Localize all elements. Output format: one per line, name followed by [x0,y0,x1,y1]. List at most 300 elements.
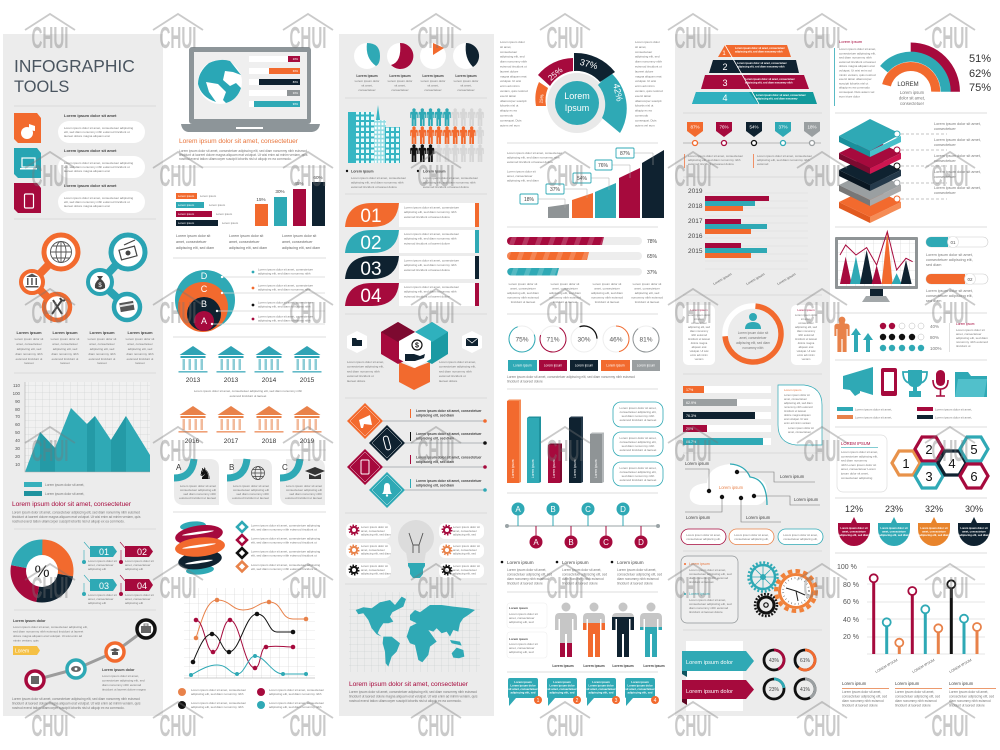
concentric arcs chart: LOREM [897,82,919,88]
icon: banknote [119,240,137,260]
value callouts: 87% [620,151,631,157]
side text left of radial chart: consectetuer [500,50,517,54]
side text left of radial chart: adipiscing elit, sed [500,55,525,59]
diamond: phone [347,449,383,485]
four text columns under bars: adipiscing elit, sed diam [591,291,623,295]
note box: Lorem ipsum dolor sit amet, [689,568,726,572]
speech bubbles: 2 [576,698,579,704]
two bullet text blocks: euismod tincidunt ut laoreet dolore [423,185,469,189]
horizontal bars [176,193,239,226]
vertical bars: 45% [294,181,304,186]
icon row [843,367,987,397]
bottom text columns [842,681,996,708]
four text columns [15,330,154,365]
panel: middle column background [339,34,494,716]
progress bars [249,56,300,107]
layered stack: consectetuer [934,143,956,147]
legend: adipiscing elit, sed diam nonummy nibh [258,318,311,322]
drop percent badges: adipiscing elit, sed diam [919,533,950,537]
diamond bullet list: Lorem ipsum dolor sit amet, consectetuer adipiscing [251,536,320,540]
legend: Lorem ipsum dolor sit amet, consectetuer [258,268,313,272]
three bullet text blocks: Lorem ipsum [507,560,534,565]
two bullet text blocks: Lorem ipsum [351,170,374,174]
ring side box right: Lorem ipsum [797,308,815,312]
watermark grid: CHUI [32,158,68,193]
drop percent badges: adipiscing elit, sed diam [879,533,910,537]
dot rating side text: Lorem ipsum dolor sit [956,328,985,332]
list labels: adipiscing elit, sed diam [416,414,454,418]
watermark grid: CHUI [290,708,326,743]
area chart: 100 [13,391,21,396]
area chart legend: Lorem ipsum dolor sit amet, [45,492,84,496]
side text left of radial chart: diam nonummy nibh [500,60,527,64]
four text columns under bars [507,282,663,304]
numbered hexagons: 3 [925,469,933,484]
numbered ribbon 02 [345,230,479,254]
grouped horizontal bars by year: 2015 [688,248,703,255]
body text bottom: nostrud exerci tation ullamcorper suscipit lobortis nisl ut aliquip ex ea commodo. [12,706,125,710]
four text columns: Lorem ipsum [127,330,153,335]
horizontal bars: Lorem ipsum [200,194,217,198]
area chart legend [24,482,84,496]
numbered ribbon 03: 03 [360,259,382,280]
line chart legend: adipiscing elit, sed diam nonummy nibh [269,692,322,696]
four text columns: Lorem ipsum dolor sit [15,337,43,341]
diamond icon list [347,403,487,508]
side text left of radial chart: commodo [500,114,514,118]
tag 03: amet, consectetuer [88,597,114,601]
line chart legend: Lorem ipsum dolor sit amet, consectetuer [269,701,324,705]
drop percent badges: Lorem ipsum dolor sit [840,527,868,530]
card B: sed diam nonummy nibh [236,492,269,496]
nested circles chart: A [201,316,207,326]
card A [174,459,219,505]
pyramid: Lorem ipsum dolor sit amet, consectetuer [756,94,806,97]
diamond bullet list: Lorem ipsum dolor sit amet, consectetuer adipiscing [251,524,320,528]
grouped horizontal bars by year: Lorem ipsum [713,272,732,286]
four pie charts: Lorem ipsum [455,74,477,78]
icon: credit card [119,301,135,312]
3D bar chart: Lorem ipsum [573,459,577,478]
ring side box left: aliquam erat [692,345,707,349]
side text right of radial chart: sit amet, [635,45,647,49]
layered stack: consectetuer [934,191,956,195]
outlined note: dolore magna aliquam [784,413,811,417]
outlined text boxes: consectetuer adipiscing elit, [620,440,657,444]
four text columns under bars: amet, consectetuer [510,286,536,290]
lollipop chart: 100 % [837,564,857,571]
percent rings: 75% [515,336,529,344]
outlined pills: Lorem ipsum dolor sit amet, [686,533,721,537]
tag 03 [82,575,117,605]
right column heading and text: euismod tincidunt ut laoreet [839,60,876,64]
four text columns under bars: tincidunt ut laoreet [553,300,577,304]
ring with person: adipiscing elit, sed diam [736,341,770,345]
watermark grid: CHUI [160,295,196,330]
side text left of radial chart: autem vel eum [500,123,520,127]
four text columns under bars: amet, consectetuer [552,286,578,290]
dot rating: 40% [930,324,939,329]
three bullet text blocks [501,560,662,586]
four text columns under bars: Lorem ipsum dolor sit [593,282,621,286]
numbered ribbon 01 [345,203,479,227]
bulb side pills: adipiscing elit, sed diam [361,552,391,556]
step 3 [106,643,124,661]
nested circles chart: B [201,299,207,309]
lollipop chart: 60 % [843,599,859,606]
horizontal bars: Lorem ipsum [178,194,195,198]
dot rating side text: tincidunt ut [956,344,971,348]
timeline text left: Lorem ipsum dolor [13,619,46,623]
progress bars: 30% [293,91,299,95]
four pie charts: Lorem ipsum dolor [421,79,445,83]
gears and clock [748,562,816,616]
outlined note: Lorem ipsum dolor sit [784,394,810,397]
two bullet text blocks: Lorem ipsum [423,170,446,174]
grouped horizontal bars by year: Lorem ipsum [746,272,765,286]
drop percent badges: Lorem ipsum dolor sit [880,527,908,530]
ring side box right: dolore magna [798,341,815,345]
right column heading and text: suscipit lobortis nisl ut [839,81,868,85]
people fill chart [552,602,665,668]
outlined text boxes: Lorem ipsum dolor sit amet, [619,436,657,440]
three text columns [176,234,320,250]
lollipop chart: LOREM IPSUM [949,658,972,674]
three bullet text blocks: consectetuer adipiscing elit, sed [562,572,607,576]
ring side box left: nibh euismod [691,333,707,337]
three bullet text blocks: diam nonummy nibh euismod [617,577,659,581]
list item 1: laoreet dolore magna aliquam erat [64,134,110,138]
horizontal bars: Lorem ipsum [222,221,239,225]
diamond: paperclip [369,425,405,461]
nested circles chart [175,268,325,332]
lorem ipsum box [837,435,887,492]
three text columns: adipiscing elit, sed diam [282,246,320,250]
numbered ribbon 04: euismod tincidunt ut laoreet dolore [404,294,450,298]
speech bubbles: Lorem ipsum [553,680,571,684]
outlined pills [681,529,823,544]
ring side box right: aliquam erat [799,345,814,349]
numbered ribbon 04 [345,283,479,307]
numbered ribbon 03: euismod tincidunt ut laoreet dolore [404,268,450,272]
gray layer [839,170,901,206]
list labels: adipiscing elit, sed diam [416,460,454,464]
alternating timeline: B [550,505,556,514]
bulb side pills: Lorem ipsum dolor sit [453,544,480,548]
bulb side pills: amet, consectetuer [361,568,385,572]
orange temples with years: 2019 [300,438,315,445]
icon: dollar hand: $ [415,342,419,350]
four text columns: adipiscing elit, sed [128,347,153,351]
right column heading and text: eum iriure dolor [839,94,860,98]
yellow tag [13,646,40,655]
progress bars striped: 37% [647,270,658,276]
icon row legend: Lorem ipsum dolor sit amet, [855,416,892,420]
line chart legend: Lorem ipsum dolor sit amet, consectetuer [269,688,324,692]
lollipop chart: 80 % [843,582,859,589]
colored labels [508,360,660,371]
speech bubbles: adipiscing elit, sed [549,690,575,694]
four text columns: diam nonummy nibh [51,352,79,356]
timeline text right: tincidunt ut laoreet dolore magna [102,688,146,692]
four text columns under bars: amet, consectetuer [594,286,620,290]
bulb side pills: adipiscing elit, sed [453,533,476,537]
watermark grid: CHUI [804,20,840,55]
area chart: 30 [15,446,21,451]
side text right of radial chart: euismod tincidunt ut [635,64,662,68]
bulb side pills: Lorem ipsum dolor sit [361,564,388,568]
icon row legend [837,407,972,420]
pennant text: Lorem ipsum dolor sit amet, consectetuer [688,154,743,158]
cloud diagram: Lorem ipsum [685,461,710,466]
drop percent badges: adipiscing elit, sed diam [959,533,990,537]
bottom text columns: Lorem ipsum dolor sit amet, [949,690,988,694]
dot rating side text [949,322,988,352]
outlined text boxes: consectetuer adipiscing elit, [620,410,657,414]
gear icons [350,526,452,574]
three bullet text blocks: tincidunt ut laoreet dolore [617,582,653,586]
lorem ipsum box: consectetuer adipiscing [841,476,873,480]
list item 2 [58,148,145,178]
line chart legend [178,688,324,709]
hex text right: consectetuer adipiscing elit, [439,365,476,369]
watermark grid: CHUI [546,295,584,330]
watermark grid: CHUI [418,433,454,468]
growth bar chart [520,148,664,218]
ring side box right: consectetuer [798,321,814,325]
note box: diam nonummy nibh euismod [689,606,729,610]
value callouts [520,148,634,204]
radial percent chart: 25% [546,65,564,83]
heading: crimson map: Lorem ipsum dolor sit amet, consectetuer [349,681,469,688]
dot rating side text: nonummy nibh euismod [956,340,988,344]
three text columns: amet, consectetuer [176,240,207,244]
watermark grid: CHUI [290,20,326,55]
pennant percent row: 87% [690,124,700,130]
outlined text boxes: euismod tincidunt ut laoreet [620,448,657,452]
ring side box left: diam nonummy [690,329,709,333]
speech bubbles: adipiscing elit, sed [510,690,536,694]
four text columns: adipiscing elit, sed [17,347,42,351]
list item 2: laoreet dolore magna aliquam erat [64,169,110,173]
layered stack: Lorem ipsum dolor sit amet, [934,122,981,126]
ring side box left: adipiscing elit, sed [688,325,710,329]
watermark grid: CHUI [546,433,584,468]
3D bar chart [507,400,604,483]
hex text left: laoreet dolore [347,379,366,383]
area chart [13,382,150,472]
diamond: bell [369,472,405,508]
watermark grid: CHUI [418,708,454,743]
side text left of radial chart: euismod tincidunt ut [500,64,527,68]
ring side box left [683,305,715,365]
numbered hexagons: 1 [902,456,910,471]
legend: Lorem ipsum dolor sit amet, consectetuer [258,314,313,318]
folder hex icon [347,331,367,353]
lollipop chart: LOREM IPSUM [875,658,898,674]
tag 01: amet, consectetuer [88,563,114,567]
tag 03: Lorem ipsum dolor sit [88,593,117,597]
speech bubbles: 3 [615,698,618,704]
three bullet text blocks: Lorem ipsum dolor sit amet, [617,568,656,572]
outlined note: nonummy nibh euismod [784,405,813,409]
legend: Lorem ipsum dolor sit amet, consectetuer [258,284,313,288]
side text right of radial chart: consequat. Duis [635,118,657,122]
speech bubbles: sit amet, consectetuer [547,687,578,691]
layered stack: Lorem ipsum dolor sit amet, [934,186,981,190]
speech bubbles: 4 [654,698,657,704]
icon: user [745,313,761,329]
timeline text left: Lorem ipsum dolor sit amet, consectetuer adipiscing elit, [13,625,88,629]
watermark grid: CHUI [804,295,840,330]
outlined pills: Lorem ipsum dolor sit amet, [734,533,769,537]
pennant text: euismod tincidunt ut laoreet dolore [688,162,734,166]
outlined note: amet, consectetuer [784,397,807,401]
side text left of radial chart: lobortis nisl ut [500,104,519,108]
outlined note: tincidunt ut laoreet [784,409,806,413]
right column heading and text: Lorem ipsum [839,39,863,44]
dot rating: 100% [930,346,942,351]
bulb side pills [346,523,484,578]
numbered ribbon 01: adipiscing elit, sed diam nonummy nibh [404,210,457,214]
outlined text boxes: euismod tincidunt ut laoreet [620,418,657,422]
grouped horizontal bars by year: 2019 [688,188,703,195]
teal temples with years: 2013 [224,377,239,384]
bottom text columns: diam nonummy nibh euismod [842,699,884,703]
list item 2: Lorem ipsum dolor sit amet, consectetuer adipiscing [64,161,133,165]
timeline text right: Lorem ipsum dolor sit amet, [102,674,139,678]
body text: nostrud exerci tation ullamcorper suscipit lobortis nisl ut aliquip ex ea commodo. [179,157,292,161]
numbered hexagons: 4 [948,456,956,471]
ribbon: teal [682,651,754,677]
speech bubbles: Lorem ipsum dolor [510,684,537,688]
lollipop chart [837,564,985,674]
pennant text: euismod [757,162,769,166]
watermark grid: CHUI [32,708,68,743]
bulb side pills: adipiscing elit, sed diam [361,533,391,537]
dot rating: 80% [930,335,939,340]
card B: B [229,463,234,472]
pyramid: adipiscing elit, sed diam nonummy nibh [745,82,793,84]
icon row legend: Lorem ipsum dolor sit amet, [935,408,972,412]
four text columns: Lorem ipsum [16,330,42,335]
drop percent badges: amet, consectetuer [842,530,866,534]
lorem ipsum box: ipsum dolor sit amet, [841,472,869,476]
three bullet text blocks: diam nonummy nibh euismod [562,577,604,581]
teal series [189,654,308,677]
teal temples with years: 2014 [262,377,277,384]
concentric arcs chart: 62% [969,68,991,80]
icon: megaphone [843,367,873,396]
speech bubbles: 1 [537,698,540,704]
speech bubbles: sit amet, consectetuer [625,687,656,691]
numbered ribbon 04: Lorem ipsum dolor sit amet, consectetuer [404,285,459,289]
outlined text boxes: sed diam nonummy nibh [622,444,655,448]
area chart: 110 [13,383,21,388]
outlined note: Lorem ipsum [784,388,802,392]
ring with person: amet, consectetuer [739,336,767,340]
side text left of radial chart: consequat. Duis [500,118,522,122]
area chart legend: Lorem ipsum dolor sit amet, [45,483,84,487]
small text boxes: Lorem ipsum [509,637,528,641]
outlined text boxes: consectetuer adipiscing elit, [620,470,657,474]
list labels: adipiscing elit, sed diam [416,484,454,488]
panel: right column background [675,34,830,716]
lorem ipsum box: amet, consectetuer Lorem [841,467,876,471]
four text columns: Lorem ipsum dolor sit [88,337,116,341]
icon: phone tile [14,183,41,213]
list item 3: Lorem ipsum dolor sit amet [64,183,117,188]
bulb side pills: amet, consectetuer [453,548,477,552]
percent rings: 81% [639,336,653,344]
cloud diagram: Lorem ipsum [780,474,805,479]
teal temples with years [178,346,322,384]
small rings: 43% [769,658,780,664]
four pie charts: Lorem ipsum dolor [355,79,379,83]
pennant percent row [683,122,821,146]
layered stack: consectetuer [934,159,956,163]
concentric arcs chart [884,47,991,106]
note box: consectetuer adipiscing elit, sed [689,572,732,576]
watermark grid: CHUI [674,295,712,330]
four text columns: diam nonummy nibh [126,352,154,356]
diamond bullet list: Lorem ipsum dolor sit amet, consectetuer adipiscing [251,550,320,554]
ring with person [723,304,783,364]
three bullet text blocks: tincidunt ut laoreet dolore [507,582,543,586]
ring side box right: diam nonummy [797,329,816,333]
dot rating [880,323,942,351]
hexagon cubes [381,322,448,390]
side text right of radial chart: diam nonummy nibh [635,60,662,64]
note box: Lorem ipsum dolor sit amet, [689,598,726,602]
three text columns: adipiscing elit, sed diam [229,246,267,250]
lorem ipsum box: nibh Lorem ipsum dolor sit [841,463,876,467]
side text left of radial chart: veniam, quis nostrud [500,89,528,93]
four text columns: amet, consectetuer [16,342,42,346]
four text columns: euismod tincidunt ut [127,357,154,361]
lollipop chart: 40 % [843,617,859,624]
two bullet text blocks: Lorem ipsum dolor sit amet, consectetuer [351,176,406,180]
slider 01 text: Lorem ipsum dolor sit amet, [926,253,973,257]
value bars: 20% [686,427,694,431]
numbered ribbon 03: adipiscing elit, sed diam nonummy nibh [404,263,457,267]
lorem ipsum box: LOREM IPSUM [841,441,871,446]
bottom text columns: tincidunt ut laoreet dolore [842,704,878,708]
side text right of radial chart: exerci tation [635,94,652,98]
icon: laptop tile [14,148,41,178]
panel: left column background [3,34,163,716]
small text boxes [507,603,547,658]
note box [681,556,738,623]
radial percent chart: 37% [579,57,599,71]
hex text left: consectetuer adipiscing elit, [347,365,384,369]
teal layer [839,119,901,157]
ring side box right: adipiscing elit, sed [795,325,817,329]
bottom text columns: Lorem ipsum [895,681,920,686]
ribbon: teal: Lorem ipsum dolor [686,660,733,666]
legend [252,268,313,322]
slider 01 text: consectetuer adipiscing elit, [926,258,973,262]
side text left of radial chart: laoreet dolore [500,69,519,73]
outlined note: adipiscing elit, sed diam [784,401,813,405]
drop percent badges: adipiscing elit, sed diam [839,533,870,537]
hex text right: euismod tincidunt ut [439,374,466,378]
four text columns: amet, consectetuer [52,342,78,346]
side text right of radial chart: enim ad minim [635,84,655,88]
percent rings [505,321,664,357]
small text boxes: amet, consectetuer [509,616,535,620]
list item 1: Lorem ipsum dolor sit amet, consectetuer adipiscing [64,126,133,130]
